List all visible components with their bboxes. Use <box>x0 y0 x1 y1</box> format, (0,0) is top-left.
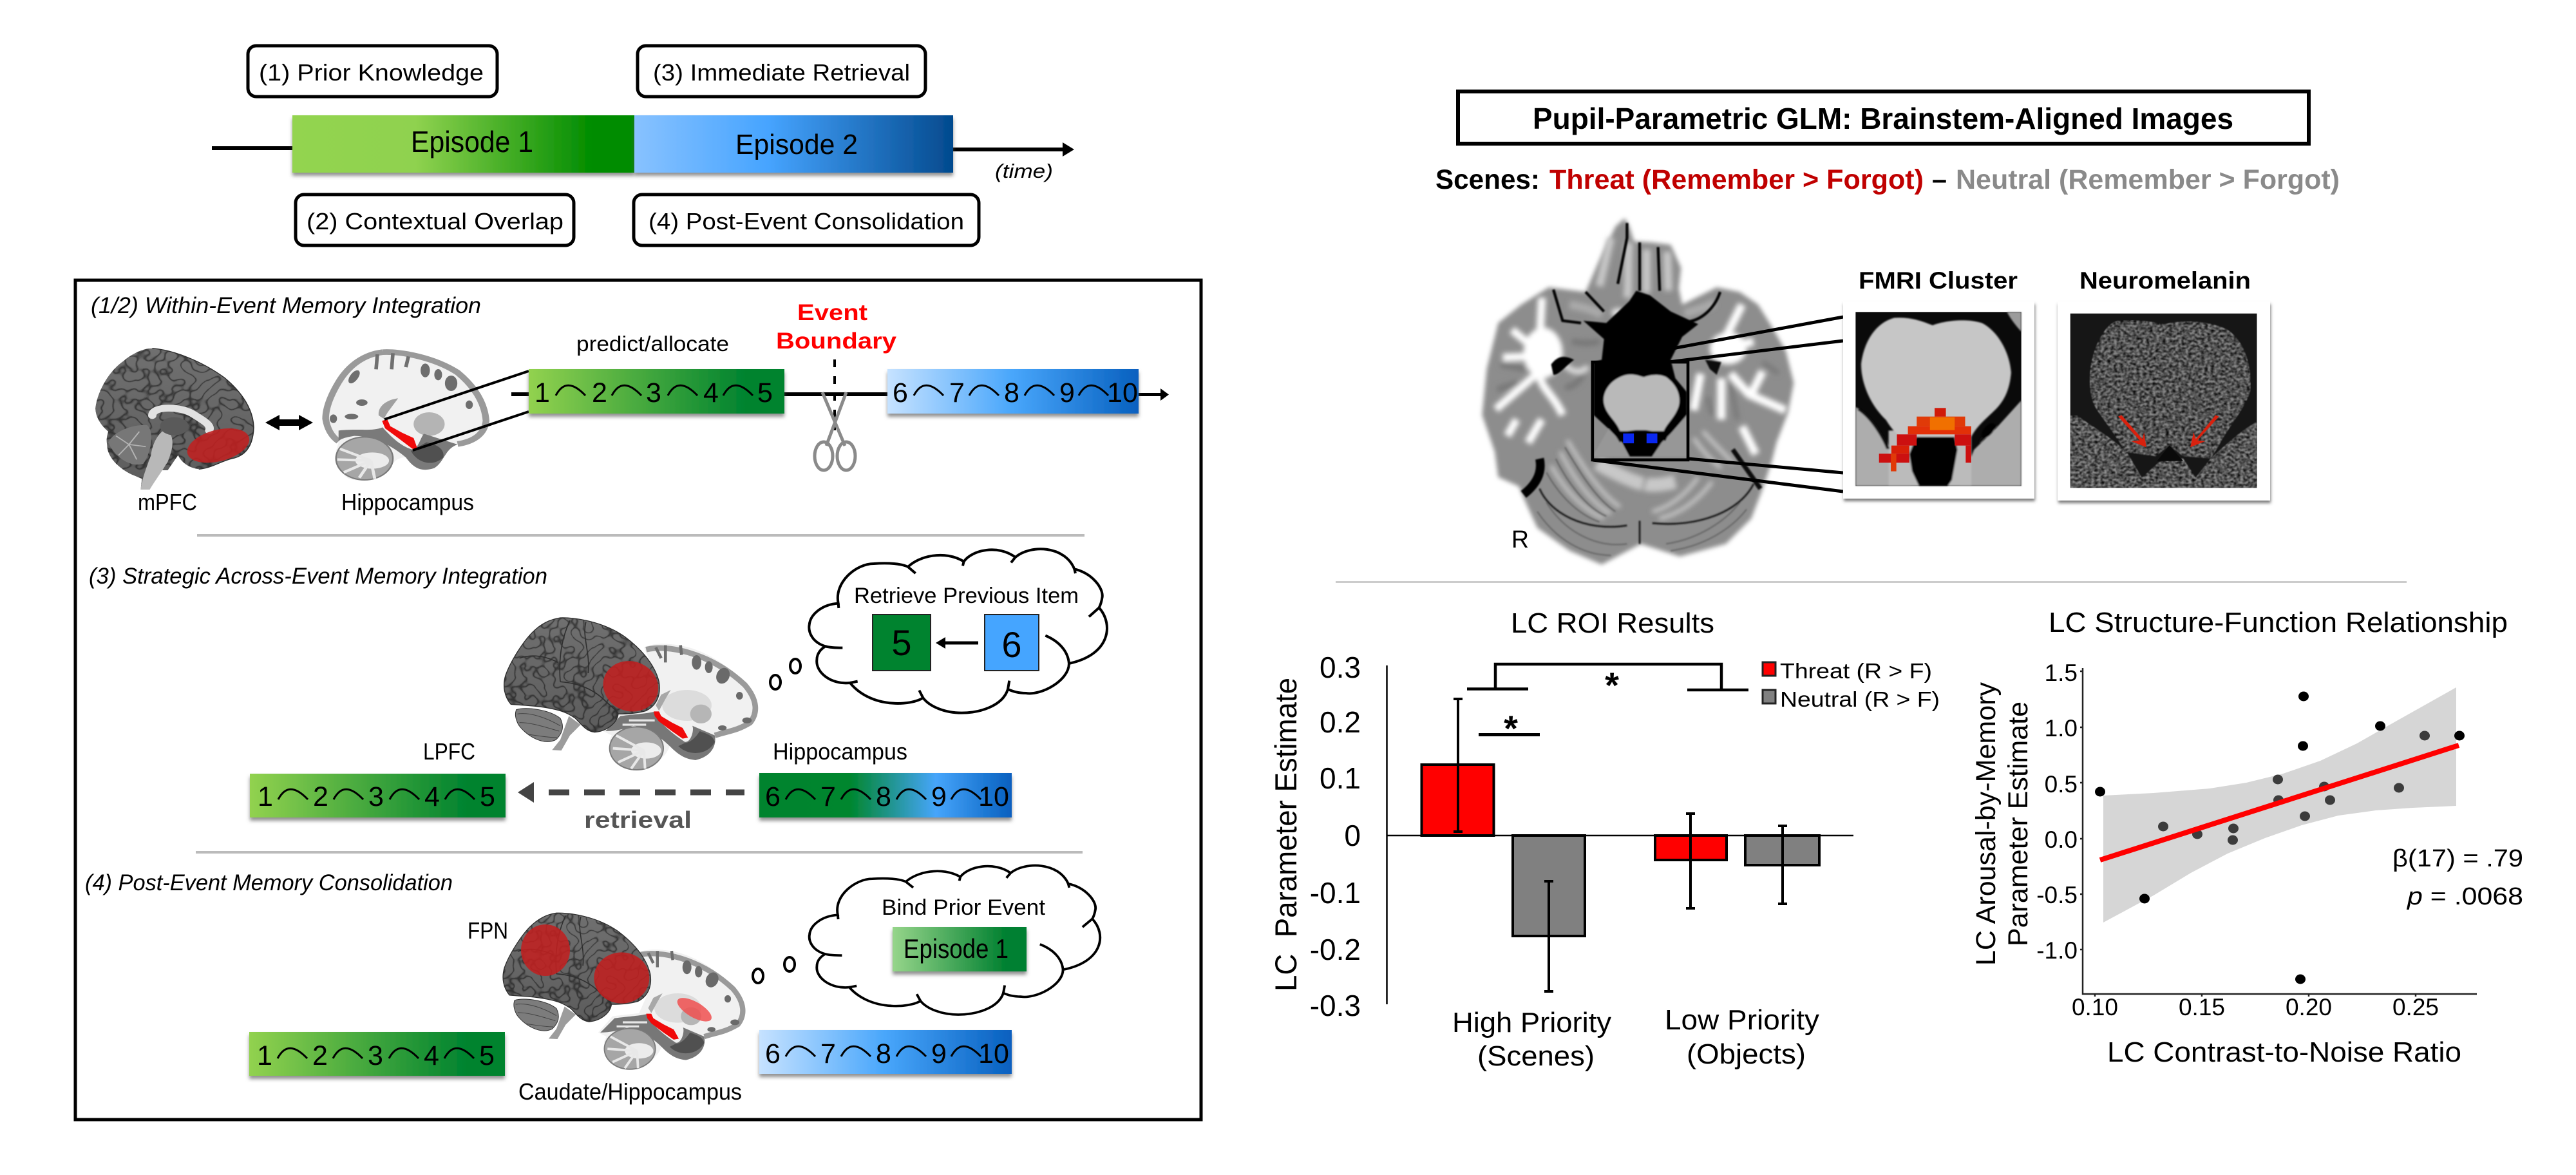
label: caudate/hippocampus: Caudate/Hippocampus <box>518 1078 742 1105</box>
contrast subtitle <box>1435 164 2340 195</box>
y tick labels: -0.5 <box>2036 882 2078 908</box>
icon: medial brain with mPFC <box>95 349 255 490</box>
sequence bar: items 6 to 10 retrieved: 8 <box>876 781 891 812</box>
episode 2 bar: Episode 2 <box>735 129 858 160</box>
y axis label: Parameter Estimate <box>2003 702 2034 946</box>
dark central cistern <box>1584 291 1698 457</box>
statistics annotation: β(17) = .79 <box>2392 845 2523 872</box>
x tick labels <box>2072 994 2439 1020</box>
brainstem <box>1604 374 1680 431</box>
y axis label: LC Arousal-by-Memory <box>1971 682 2002 966</box>
category label: high priority: (Scenes) <box>1477 1040 1595 1072</box>
y tick labels: -0.2 <box>1310 933 1361 966</box>
legend: Neutral (R > F) <box>1780 687 1940 711</box>
category label: low priority: Low Priority <box>1665 1004 1819 1036</box>
label: neuromelanin: Neuromelanin <box>2079 267 2251 294</box>
panel: neuromelanin image <box>2058 301 2270 501</box>
contrast subtitle: Scenes: <box>1435 164 1540 195</box>
label box: prior knowledge <box>248 46 497 97</box>
arrow: sequence continuation <box>1139 388 1169 401</box>
bar: low priority neutral <box>1745 836 1819 865</box>
data points <box>2095 692 2465 984</box>
bar: high priority threat <box>1422 765 1494 836</box>
chart title: LC Structure-Function Relationship <box>2049 607 2508 638</box>
region: FPN posterior <box>594 952 649 1004</box>
thought cloud: retrieve previous item: 5 <box>891 622 912 663</box>
title box: Pupil-Parametric GLM: Brainstem-Aligned Images <box>1533 102 2233 135</box>
sequence bar: items 6 to 10: 8 <box>1004 377 1019 408</box>
x tick labels: 0.15 <box>2179 994 2225 1020</box>
event boundary label <box>776 300 897 354</box>
zoom lines to event sequence <box>384 371 529 450</box>
episode 1 bar <box>292 115 634 173</box>
y tick labels: -0.1 <box>1310 876 1361 910</box>
confidence band <box>2103 687 2456 922</box>
sequence bar: items 1 to 5: 1 <box>258 781 273 812</box>
sequence bar: items 1 to 5: 5 <box>479 1040 495 1071</box>
region: FPN anterior <box>521 924 570 976</box>
bar chart: LC ROI results <box>1269 607 1940 1072</box>
sequence bar: items 1 to 5: 3 <box>368 1040 383 1071</box>
sequence bar: items 6 to 10 retrieved <box>759 773 1012 817</box>
thought cloud: bind prior event: Bind Prior Event <box>882 895 1046 920</box>
icon: scissors and boundary cut <box>815 359 855 470</box>
arrow: time direction <box>953 142 1074 157</box>
activation cluster <box>1879 408 1971 472</box>
region: hippocampus <box>382 419 417 449</box>
y axis label <box>1971 682 2034 966</box>
arrow: bidirectional connection <box>265 415 313 430</box>
sequence bar: items 6 to 10: 9 <box>931 1038 947 1069</box>
right white matter <box>1694 305 1786 454</box>
arrow: dashed retrieval arrow <box>518 782 744 803</box>
timeline axis left segment <box>212 146 292 150</box>
thought bubbles <box>770 659 800 689</box>
statistics annotation <box>2392 845 2523 910</box>
sequence bar: items 1 to 5: 4 <box>424 781 440 812</box>
timeline: episodes and retrieval/consolidation stages <box>212 46 1074 245</box>
time label: (time) <box>995 160 1053 182</box>
sequence bar: items 1 to 5: 2 <box>313 781 328 812</box>
label box: post-event consolidation: (4) Post-Event Consolidation <box>649 208 964 234</box>
heading: strategic across-event integration: (3) Strategic Across-Event Memory Integration <box>89 564 547 589</box>
thought cloud: bind prior event: Episode 1 <box>904 933 1009 964</box>
category label: high priority <box>1452 1007 1611 1072</box>
sequence bar: items 6 to 10: 6 <box>893 377 908 408</box>
sequence bar: items 6 to 10: 7 <box>949 377 965 408</box>
contrast subtitle: Threat (Remember > Forgot) <box>1549 164 1924 195</box>
icon: hippocampus sagittal slice <box>324 351 529 481</box>
sequence bar: items 1 to 5 <box>250 774 506 817</box>
sequence bar: items 6 to 10: 7 <box>820 1038 836 1069</box>
thought cloud: bind prior event <box>810 866 1100 1015</box>
sequence bar: items 1 to 5: 1 <box>535 377 550 408</box>
axes <box>1387 665 1853 1004</box>
icon: lateral brain with LPFC and hippocampus <box>504 618 755 770</box>
sequence bar: items 6 to 10 retrieved: 10 <box>978 781 1009 812</box>
label box: contextual overlap: (2) Contextual Overlap <box>307 208 564 234</box>
y tick labels: -0.3 <box>1310 989 1361 1022</box>
significance bar: threat vs neutral <box>1479 708 1540 749</box>
sequence bar: items 1 to 5: 4 <box>703 377 719 408</box>
sequence bar: items 6 to 10 <box>887 369 1139 414</box>
sequence bar: items 1 to 5: 4 <box>424 1040 439 1071</box>
category label: high priority: High Priority <box>1452 1007 1611 1038</box>
chart title: LC ROI Results <box>1511 607 1714 639</box>
significance bar: threat vs neutral: * <box>1504 708 1518 749</box>
axes <box>2080 668 2477 997</box>
event boundary label: Boundary <box>776 329 897 354</box>
x tick labels: 0.25 <box>2392 994 2439 1020</box>
sequence bar: items 6 to 10: 10 <box>978 1038 1009 1069</box>
heading: within-event integration: (1/2) Within-Event Memory Integration <box>91 293 481 318</box>
sequence bar: items 6 to 10 retrieved: 6 <box>765 781 781 812</box>
label box: prior knowledge: (1) Prior Knowledge <box>259 59 484 86</box>
y tick labels <box>2036 660 2078 964</box>
y tick labels: 0 <box>1344 819 1361 852</box>
y tick labels: 0.0 <box>2045 826 2078 853</box>
label: mPFC: mPFC <box>138 489 197 515</box>
thought bubbles <box>753 957 795 983</box>
episode 1 bar: Episode 1 <box>411 125 533 158</box>
y axis label: LC Parameter Estimate <box>1269 678 1303 991</box>
sequence bar: items 6 to 10: 8 <box>876 1038 891 1069</box>
legend: Threat (R > F) <box>1780 659 1932 683</box>
zoom box <box>1593 362 1688 460</box>
y tick labels: 0.3 <box>1320 651 1361 684</box>
significance bracket: priority interaction <box>1467 664 1748 705</box>
sequence bar: items 6 to 10 <box>759 1030 1012 1074</box>
label: FMRI cluster: FMRI Cluster <box>1859 267 2018 294</box>
region: LPFC <box>596 653 665 719</box>
contrast subtitle: Neutral (Remember > Forgot) <box>1956 164 2340 195</box>
sequence bar: items 1 to 5: 5 <box>480 781 495 812</box>
sequence bar: items 6 to 10: 9 <box>1059 377 1075 408</box>
retrieval label: retrieval <box>584 807 692 833</box>
legend <box>1763 659 1940 711</box>
category label: low priority <box>1665 1004 1819 1070</box>
sequence bar: items 1 to 5: 3 <box>368 781 384 812</box>
panel: FMRI cluster image <box>1843 301 2034 499</box>
y tick labels: 1.0 <box>2045 715 2078 741</box>
x axis label: LC Contrast-to-Noise Ratio <box>2107 1036 2461 1068</box>
sequence bar: items 6 to 10 retrieved: 7 <box>820 781 836 812</box>
title box <box>1458 91 2309 144</box>
region: caudate <box>674 993 715 1026</box>
event boundary label: Event <box>797 300 867 325</box>
sequence bar: items 1 to 5 <box>529 369 784 414</box>
sequence bar: items 1 to 5: 5 <box>757 377 773 408</box>
label: FPN: FPN <box>468 917 508 944</box>
sequence axis <box>511 392 887 396</box>
axial brain image <box>1482 218 1794 564</box>
left white matter <box>1496 298 1562 443</box>
zoom lines to inset panels <box>1593 317 1843 492</box>
category label: low priority: (Objects) <box>1687 1038 1806 1070</box>
label box: contextual overlap <box>296 195 574 245</box>
label: LPFC: LPFC <box>423 738 475 765</box>
sequence bar: items 1 to 5 <box>249 1032 505 1076</box>
y tick labels: 1.5 <box>2045 660 2078 686</box>
label: hippocampus: Hippocampus <box>773 738 907 765</box>
sequence bar: items 1 to 5: 3 <box>646 377 661 408</box>
x tick labels: 0.20 <box>2286 994 2332 1020</box>
sulci <box>1553 223 1720 323</box>
panel: memory integration stages <box>75 280 1201 1120</box>
predict/allocate label: predict/allocate <box>576 332 729 356</box>
thought cloud: retrieve previous item: Retrieve Previous Item <box>854 584 1079 608</box>
regression line <box>2100 745 2459 860</box>
statistics annotation: p = .0068 <box>2407 883 2523 910</box>
contrast subtitle: – <box>1932 164 1947 195</box>
label: hippocampus: Hippocampus <box>341 489 474 515</box>
y tick labels: 0.2 <box>1320 705 1361 739</box>
y tick labels: -1.0 <box>2036 937 2078 964</box>
bar: high priority neutral <box>1513 836 1585 936</box>
thought cloud: retrieve previous item: 6 <box>1001 624 1022 665</box>
icon: lateral brain with FPN, caudate and hippocampus <box>503 913 743 1069</box>
bar: low priority threat <box>1655 836 1727 860</box>
sequence bar: items 6 to 10 retrieved: 9 <box>931 781 947 812</box>
thought cloud: retrieve previous item <box>809 549 1107 713</box>
ventricles <box>1551 357 1574 375</box>
sequence bar: items 1 to 5: 2 <box>592 377 607 408</box>
sequence bar: items 6 to 10: 6 <box>765 1038 781 1069</box>
x tick labels: 0.10 <box>2072 994 2118 1020</box>
label box: immediate retrieval: (3) Immediate Retrieval <box>653 59 910 86</box>
blue LC markers <box>1623 434 1658 443</box>
episode 2 bar <box>634 115 953 173</box>
label box: immediate retrieval <box>638 46 925 97</box>
heading: post-event consolidation: (4) Post-Event Memory Consolidation <box>85 870 453 895</box>
error bars <box>1454 698 1787 991</box>
label box: post-event consolidation <box>634 195 979 245</box>
red arrows <box>2118 415 2219 447</box>
y tick labels: 0.5 <box>2045 771 2078 798</box>
region: mPFC highlight <box>182 422 255 469</box>
region: hippocampus <box>654 711 688 739</box>
label: right hemisphere: R <box>1511 526 1529 553</box>
y tick labels <box>1310 651 1361 1022</box>
sequence bar: items 1 to 5: 2 <box>312 1040 328 1071</box>
frontal folds <box>1600 238 1669 298</box>
y tick labels: 0.1 <box>1320 761 1361 795</box>
scatter plot: LC structure-function relationship <box>1971 607 2523 1068</box>
sequence bar: items 1 to 5: 1 <box>257 1040 272 1071</box>
region: hippocampus <box>646 1014 679 1040</box>
cerebellum folia <box>1551 431 1733 519</box>
significance bracket: priority interaction: * <box>1605 665 1619 705</box>
sequence bar: items 6 to 10: 10 <box>1107 377 1138 408</box>
